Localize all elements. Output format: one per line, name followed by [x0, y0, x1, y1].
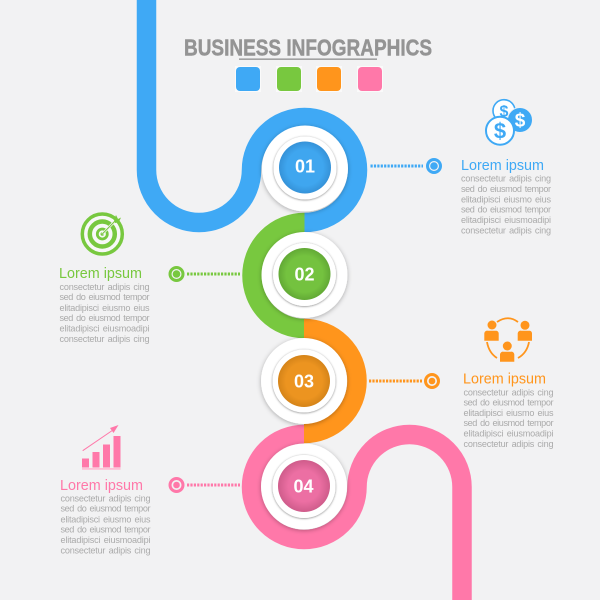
- text block 03: [463, 372, 554, 449]
- text block 01: consectetur adipis cing: [461, 174, 551, 184]
- text block 01: elitadipisci eiusmo eius: [461, 194, 551, 204]
- step 01 badge: 01: [295, 156, 315, 176]
- text block 01: consectetur adipis cing: [461, 226, 551, 236]
- text block 01: sed do eiusmod tempor: [461, 204, 551, 214]
- text block 04: sed do eiusmod tempor: [60, 504, 150, 514]
- text block 02: consectetur adipis cing: [60, 334, 150, 344]
- connector 04: [170, 478, 240, 492]
- ribbon: green segment: [252, 222, 304, 328]
- text block 04: consectetur adipis cing: [60, 546, 150, 556]
- text block 01: elitadipisci eiusmoadipi: [461, 215, 551, 225]
- text block 04: elitadipisci eiusmoadipi: [60, 535, 150, 545]
- ribbon: orange segment: [304, 328, 357, 434]
- ribbon: blue segment: [146, 0, 358, 222]
- icon: coins: [486, 100, 532, 145]
- colour swatches: [235, 66, 383, 92]
- step 04 badge: 04: [293, 476, 314, 496]
- text block 03: sed do eiusmod tempor: [464, 398, 554, 408]
- text block 01: Lorem ipsum: [461, 158, 544, 174]
- text block 04: Lorem ipsum: [60, 478, 143, 494]
- text block 02: consectetur adipis cing: [60, 282, 150, 292]
- text block 03: sed do eiusmod tempor: [464, 418, 554, 428]
- text block 02: Lorem ipsum: [59, 266, 142, 282]
- step 03 badge: [261, 338, 347, 424]
- text block 02: [59, 266, 150, 344]
- text block 03: Lorem ipsum: [463, 372, 546, 388]
- text block 01: sed do eiusmod tempor: [461, 184, 551, 194]
- icon: growth chart: [82, 425, 120, 470]
- text block 04: [60, 478, 151, 556]
- step 02 badge: 02: [294, 264, 315, 284]
- text block 04: sed do eiusmod tempor: [60, 524, 150, 534]
- text block 02: sed do eiusmod tempor: [60, 313, 150, 323]
- text block 04: elitadipisci eiusmo eius: [60, 514, 151, 524]
- step 04 badge: [261, 444, 347, 530]
- title underline: [239, 58, 377, 60]
- icon: coins: $: [515, 110, 526, 132]
- text block 02: sed do eiusmod tempor: [60, 292, 150, 302]
- text block 03: elitadipisci eiusmo eius: [464, 408, 554, 418]
- icon: team: [484, 318, 532, 362]
- text block 01: [461, 158, 551, 236]
- text block 03: consectetur adipis cing: [464, 388, 554, 398]
- text block 02: elitadipisci eiusmo eius: [60, 303, 150, 313]
- connector 02: [170, 268, 240, 280]
- step 03 badge: 03: [294, 372, 314, 392]
- text block 03: consectetur adipis cing: [464, 439, 554, 449]
- title: BUSINESS INFOGRAPHICS: [184, 34, 432, 60]
- icon: target: [82, 214, 122, 254]
- text block 04: consectetur adipis cing: [60, 494, 150, 504]
- ribbon: pink segment: [252, 434, 462, 600]
- connector 03: [369, 374, 438, 388]
- step 01 badge: [262, 126, 348, 212]
- icon: coins: $: [494, 118, 506, 144]
- connector 01: [370, 160, 440, 172]
- text block 02: elitadipisci eiusmoadipi: [60, 324, 150, 334]
- icon: coins: $: [500, 104, 509, 120]
- step 02 badge: [262, 232, 348, 318]
- text block 03: elitadipisci eiusmoadipi: [464, 428, 554, 438]
